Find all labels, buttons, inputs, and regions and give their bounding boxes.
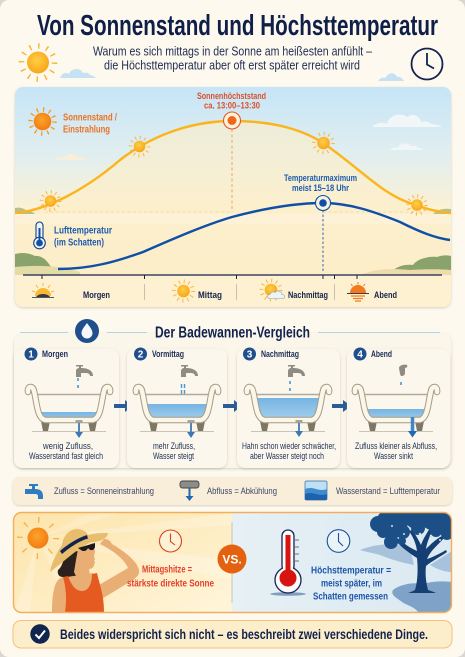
label: sun peak: ca. 13:00–13:30 (204, 100, 260, 110)
woman arm and shoulder (52, 539, 139, 612)
text: maximum temperature: Schatten gemessen (313, 592, 388, 602)
icon: header cloud right (378, 73, 404, 81)
tree shadow ground (392, 581, 452, 612)
chart: temperature guide (322, 210, 324, 273)
legend: sun position: Sonnenstand / (63, 112, 117, 124)
divider (231, 522, 233, 603)
icon: tap (25, 484, 43, 499)
panel: legend: Wasserstand = Lufttemperatur (336, 486, 440, 497)
card: Vormittag: mehr Zufluss, (153, 441, 195, 451)
chart: sun curve (15, 121, 451, 213)
label: Nachmittag: Nachmittag (288, 290, 328, 300)
card: Abend: Zufluss kleiner als Abfluss, (355, 441, 437, 451)
card: Morgen (14, 348, 119, 468)
heading: bathtub comparison: Der Badewannen-Vergleich (155, 324, 310, 342)
area under sun curve (33, 122, 434, 214)
icon: sun morning (42, 192, 60, 210)
text: midday heat: Mittagshitze = (142, 564, 192, 576)
subtitle (93, 44, 373, 72)
chart: dashed guide lines (45, 129, 420, 212)
text: midday heat: stärkste direkte Sonne (127, 578, 214, 590)
card: Abend: 4 (357, 350, 363, 360)
label: sun peak (197, 91, 266, 110)
panel: maximum temperature (232, 507, 456, 612)
label: temperature peak: meist 15–18 Uhr (292, 183, 349, 193)
legend: air temperature (34, 222, 112, 249)
card: Morgen: 1 (28, 350, 34, 360)
legend: air temperature: (im Schatten) (54, 238, 104, 248)
icon: water drop (75, 319, 99, 343)
text: maximum temperature: meist später, im (321, 578, 382, 590)
woman neck and face (74, 543, 95, 579)
panel borders: comparison (14, 512, 452, 612)
subtitle: die Höchsttemperatur aber oft erst später erreicht wird (104, 58, 360, 72)
panel: conclusion (13, 620, 452, 648)
badge: VS (218, 544, 246, 574)
icon: sunrise (32, 283, 54, 298)
label: temperature peak (284, 173, 357, 193)
woman hair (58, 551, 78, 577)
subtitle: Warum es sich mittags in der Sonne am heißesten anfühlt – (93, 44, 373, 58)
ground bushes left (15, 253, 50, 267)
card: Nachmittag (237, 348, 340, 468)
icon: sun evening (408, 196, 426, 214)
card: Nachmittag: 3 (247, 350, 253, 360)
icon: thermometer (270, 530, 306, 596)
card: Abend (347, 348, 450, 468)
card: Vormittag (127, 348, 227, 468)
label: Morgen: Morgen (83, 290, 110, 300)
label: Abend: Abend (374, 290, 397, 300)
lower axis band (15, 275, 451, 307)
card: Morgen: Morgen (42, 349, 68, 359)
icon: blue clock (327, 530, 350, 552)
horizon (15, 214, 451, 224)
tree trunk (394, 528, 447, 593)
card: Nachmittag: aber Wasser steigt noch (250, 451, 324, 461)
marker: sun peak (224, 112, 240, 129)
tree crown (370, 513, 451, 549)
woman hat (50, 529, 108, 572)
icon: clock (412, 48, 442, 80)
panel: legend (13, 477, 452, 505)
card: Nachmittag: Hahn schon wieder schwächer, (242, 441, 336, 451)
arrow: 1 to 2 (114, 400, 132, 412)
icon: red clock (160, 530, 182, 552)
icon: sun forenoon (130, 138, 148, 156)
text: maximum temperature: Höchsttemperatur = (311, 566, 391, 576)
icon: drain (180, 481, 199, 501)
icon: midday sun (174, 282, 193, 300)
card: Morgen: Wasserstand fast gleich (29, 451, 103, 461)
card: Abend: Abend (371, 349, 392, 359)
legend: sun position: Einstrahlung (63, 124, 110, 136)
badge: VS: VS. (222, 552, 242, 566)
woman tank top (63, 573, 104, 612)
chart: time axis (23, 275, 442, 300)
card: Vormittag: Wasser steigt (153, 451, 194, 461)
panel: bathtub comparison (14, 325, 452, 468)
tree sky gaps (391, 525, 441, 541)
arrow: 3 to 4 (332, 400, 351, 412)
text: maximum temperature (311, 566, 391, 602)
woman sunglasses (78, 543, 95, 551)
icon: header sun (22, 46, 54, 79)
marker: temperature peak (316, 196, 330, 210)
panel: midday heat (14, 513, 232, 612)
icon: sun with cloud (262, 280, 285, 300)
card: Abend: Wasser sinkt (374, 451, 413, 461)
panel: legend: Abfluss = Abkühlung (207, 486, 277, 497)
panel: chart (15, 87, 451, 307)
icon: water level (305, 481, 327, 500)
card: Vormittag: Vormittag (152, 349, 184, 359)
chart: temperature curve (58, 203, 450, 269)
ground bushes right (394, 255, 451, 270)
label: sun peak: Sonnenhöchststand (197, 91, 266, 101)
icon: sunset (347, 282, 369, 301)
label: Mittag: Mittag (198, 290, 222, 300)
icon: sun afternoon (314, 134, 333, 152)
card: Vormittag: 2 (138, 350, 144, 360)
legend: air temperature: Lufttemperatur (54, 226, 112, 236)
label: temperature peak: Temperaturmaximum (284, 173, 357, 183)
card: Nachmittag: Nachmittag (261, 349, 299, 359)
legend: sun position (30, 110, 117, 136)
icon: header cloud left (60, 69, 96, 78)
card: Morgen: wenig Zufluss, (42, 441, 93, 451)
text: midday heat (127, 564, 214, 590)
tree shadow upper (360, 544, 452, 572)
icon: sun in heat panel (20, 520, 56, 556)
clouds (372, 115, 442, 127)
panel: legend: Zufluss = Sonneneinstrahlung (54, 486, 154, 497)
arrow: 2 to 3 (223, 400, 242, 412)
icon: check (30, 624, 50, 644)
